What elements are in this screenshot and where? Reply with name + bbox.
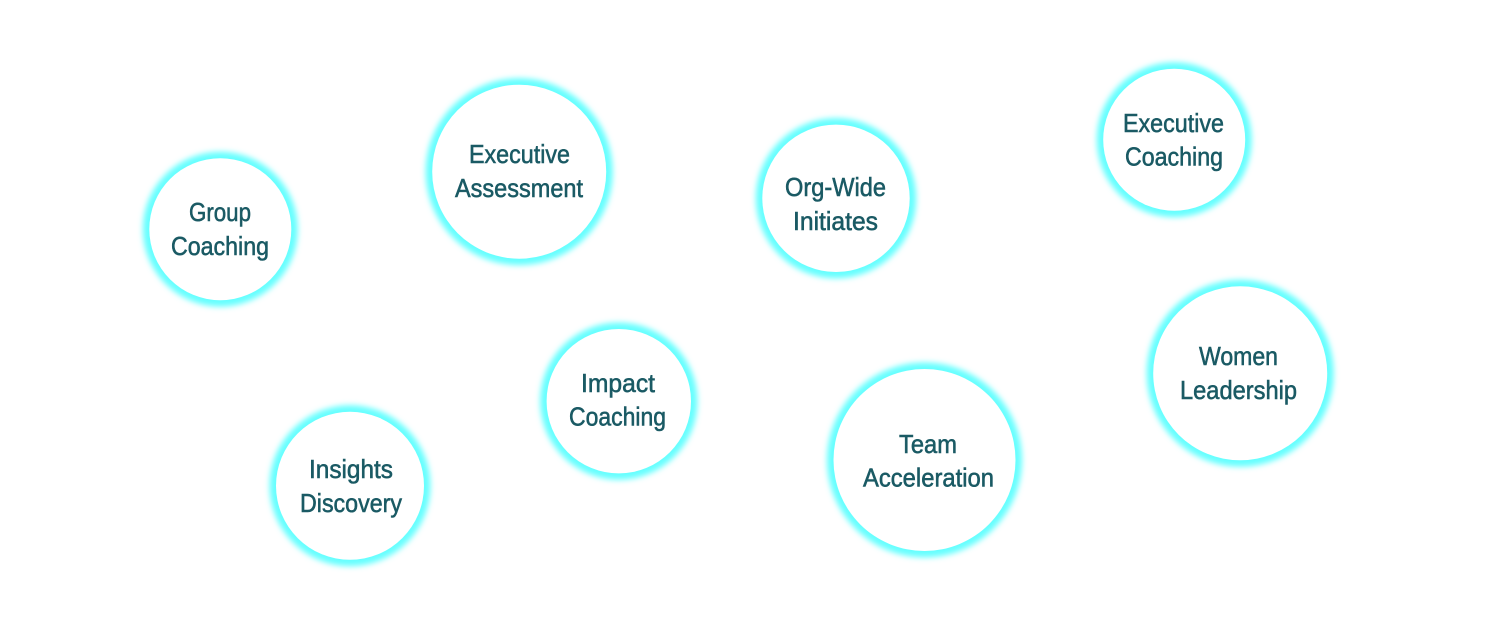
bubble: Org-Wide Initiates [756, 118, 916, 278]
bubble: Team Acceleration: Acceleration [863, 462, 994, 492]
bubble: Executive Coaching: Executive [1123, 108, 1224, 138]
bubble: Group Coaching: Coaching [171, 231, 269, 261]
bubble: Insights Discovery [270, 405, 430, 566]
bubble: Group Coaching [143, 152, 298, 307]
bubble: Women Leadership: Leadership [1180, 375, 1297, 405]
bubble: Executive Assessment: Executive [469, 139, 570, 169]
bubble: Org-Wide Initiates: Initiates [793, 206, 878, 236]
bubble: Executive Coaching [1097, 62, 1252, 217]
bubble: Women Leadership [1147, 280, 1334, 467]
bubble: Insights Discovery: Insights [309, 454, 393, 484]
bubble: Org-Wide Initiates: Org-Wide [785, 172, 886, 202]
bubble: Group Coaching: Group [189, 197, 251, 227]
bubble: Team Acceleration [827, 362, 1022, 558]
bubble: Women Leadership: Women [1199, 341, 1278, 371]
bubble: Team Acceleration: Team [899, 429, 957, 459]
bubble: Impact Coaching: Coaching [569, 402, 666, 432]
bubble: Impact Coaching: Impact [581, 368, 656, 398]
bubble: Impact Coaching [540, 322, 698, 480]
bubble: Executive Assessment: Assessment [455, 173, 584, 203]
bubble: Executive Assessment [426, 78, 613, 265]
bubble: Executive Coaching: Coaching [1125, 142, 1223, 172]
bubble: Insights Discovery: Discovery [300, 488, 402, 518]
